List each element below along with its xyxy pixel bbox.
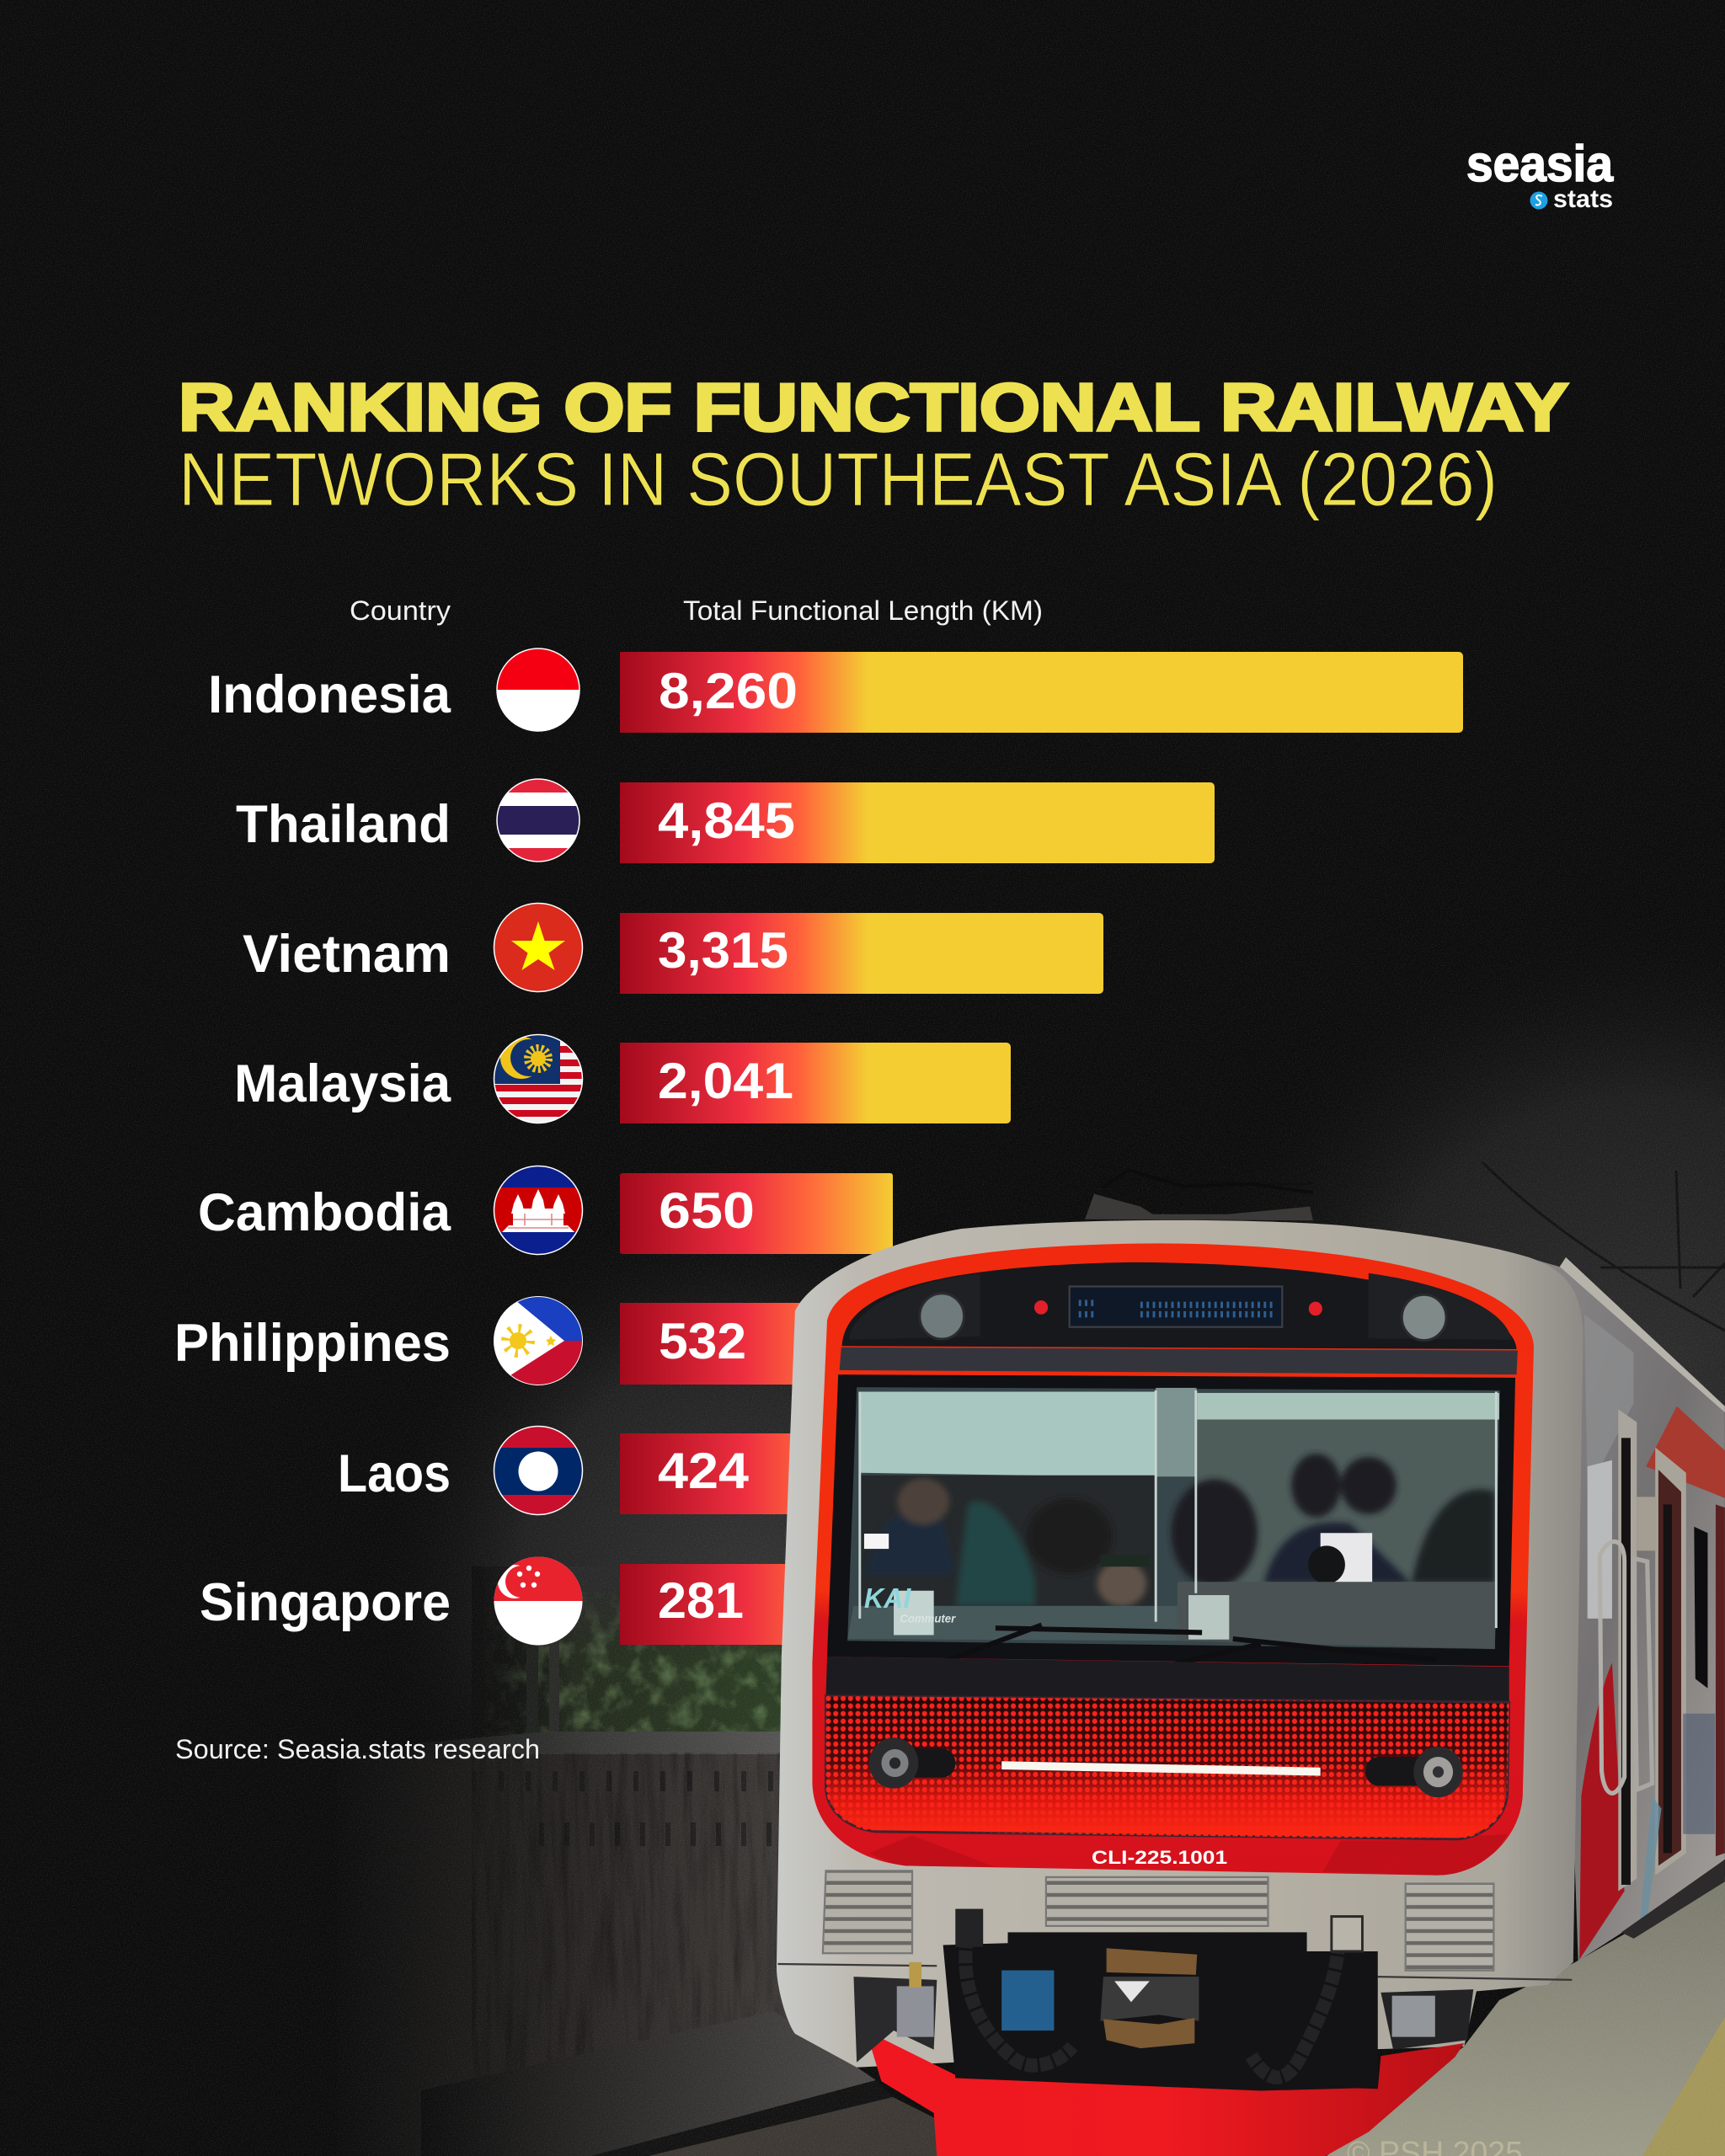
flag: Laos — [494, 1426, 583, 1515]
bar values: 2,041 — [658, 1053, 793, 1109]
title: RANKING OF FUNCTIONAL RAILWAY — [179, 370, 1568, 445]
bar values: 650 — [659, 1182, 755, 1239]
train: red front mask — [812, 1243, 1534, 1876]
train: vents — [823, 1870, 1493, 1971]
country names: Vietnam — [243, 925, 451, 984]
country names: Singapore — [200, 1573, 451, 1632]
bar values: 424 — [658, 1443, 750, 1499]
country names: Laos — [338, 1444, 451, 1503]
bar: Vietnam — [620, 913, 1103, 994]
train: coupler bay — [943, 1909, 1378, 2091]
bar: Singapore — [620, 1564, 893, 1645]
bar values: 4,845 — [658, 792, 795, 849]
country names: Philippines — [174, 1314, 451, 1373]
background: concrete wall — [399, 1732, 937, 2156]
train: passengers in cab — [862, 1454, 1495, 1607]
country names: Indonesia — [208, 665, 451, 724]
train: lower dark band — [826, 1657, 1509, 1702]
train: windshield: Commuter — [900, 1612, 956, 1625]
flag: Singapore — [494, 1556, 583, 1646]
bar values: 532 — [659, 1313, 746, 1369]
train: windshield: KAI — [864, 1582, 911, 1614]
country names: Thailand — [236, 795, 451, 854]
train: hose fittings — [853, 1962, 1473, 2063]
flag: Cambodia — [494, 1166, 583, 1255]
bar: Indonesia — [620, 652, 1463, 733]
flag: Thailand — [496, 778, 580, 862]
train: windshield — [827, 1374, 1515, 1666]
train: front body — [777, 1220, 1583, 2068]
train: carriage side — [1535, 1257, 1725, 1961]
title: NETWORKS IN SOUTHEAST ASIA (2026) — [179, 438, 1498, 522]
country names — [174, 665, 451, 1632]
train: unit number: CLI-225.1001 — [1092, 1847, 1227, 1868]
column headers: Total Functional Length (KM) — [683, 595, 1043, 626]
logo: seasia stats: stats — [1553, 185, 1613, 213]
flag: Vietnam — [494, 903, 583, 992]
logo: seasia stats: seasia — [1466, 136, 1614, 192]
background: trees — [472, 1566, 792, 1735]
train: red skirt — [866, 2031, 1464, 2156]
bar: Philippines — [620, 1303, 893, 1385]
bar values: 281 — [658, 1572, 744, 1629]
bar: Cambodia — [620, 1173, 893, 1254]
source note: Source: Seasia.stats research — [175, 1734, 540, 1764]
country names: Cambodia — [198, 1183, 451, 1242]
bar chart: functional length by country — [620, 652, 1463, 1645]
background: platform — [1327, 1876, 1725, 2156]
column headers: Country — [350, 595, 451, 626]
bar: Laos — [620, 1433, 893, 1514]
bar: Thailand — [620, 782, 1215, 863]
train: LED grille panel — [826, 1696, 1509, 1839]
flag: Malaysia — [494, 1034, 583, 1123]
bar values — [658, 663, 798, 1629]
bar values: 8,260 — [659, 663, 798, 719]
country names: Malaysia — [234, 1054, 451, 1113]
train: destination panel — [840, 1262, 1518, 1374]
bar: Malaysia — [620, 1043, 1011, 1123]
column headers — [350, 595, 1043, 626]
background: overhead wires — [1095, 1162, 1725, 1331]
train — [777, 1170, 1725, 2156]
train: lower mask facets — [869, 1834, 1508, 1876]
train: wipers — [916, 1625, 1436, 1676]
flag: Philippines — [494, 1296, 583, 1385]
train: roof equipment — [1085, 1170, 1313, 1220]
flag: Indonesia — [496, 648, 580, 732]
title — [179, 370, 1568, 522]
bar values: 3,315 — [658, 922, 788, 979]
